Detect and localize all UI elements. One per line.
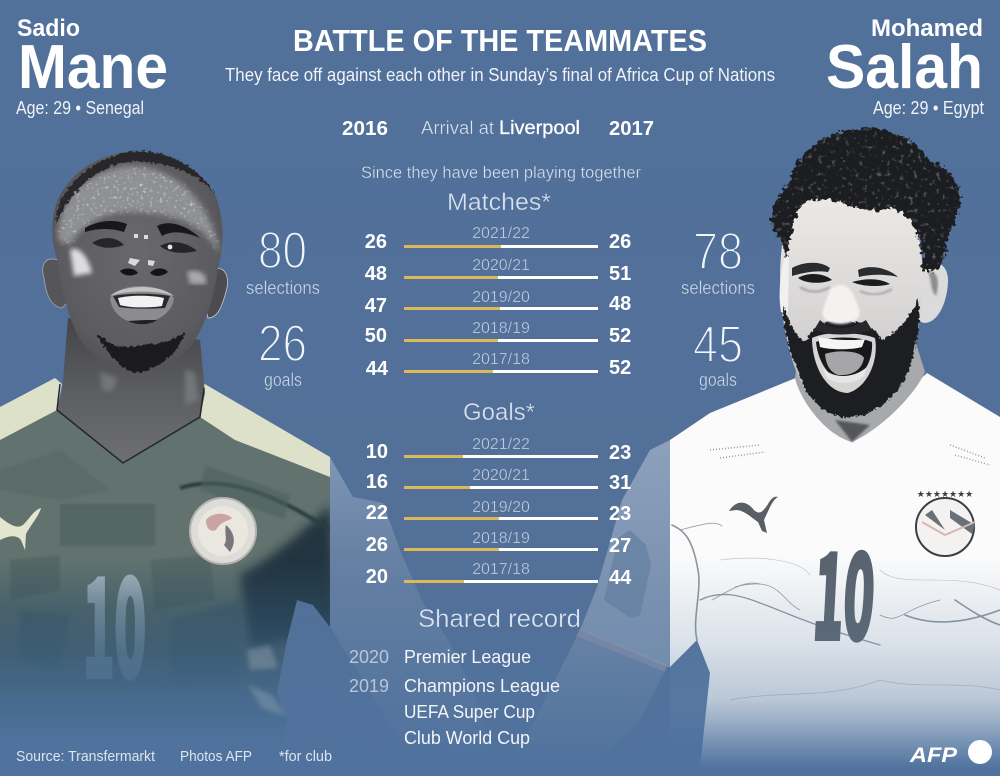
- egypt badge: [916, 489, 975, 556]
- lit arm highlight: [247, 645, 286, 716]
- row 2017/18: [366, 561, 632, 589]
- jersey of Mane: [0, 395, 330, 745]
- ear edge left: [780, 255, 789, 312]
- eyes: [798, 274, 832, 283]
- row 2018/19: 52: [609, 325, 631, 347]
- AFP logo: AFP: [909, 744, 958, 767]
- head: [52, 152, 223, 373]
- photo: Mohamed Salah: 10: [810, 504, 879, 672]
- source line: [16, 748, 332, 765]
- nose: [120, 268, 168, 276]
- right ear: [204, 269, 227, 318]
- yellow shoulder right: [200, 383, 330, 477]
- lower teeth: [823, 367, 867, 383]
- Club World Cup: Club World Cup: [404, 727, 530, 748]
- row 2017/18: 2017/18: [472, 351, 530, 368]
- stats: Salah: [681, 223, 755, 390]
- yellow shoulder left: [0, 378, 62, 440]
- row 2018/19: 2018/19: [472, 320, 530, 337]
- neck: [57, 318, 205, 463]
- nose: [823, 285, 860, 324]
- row 2020/21: [366, 467, 631, 494]
- surname: Mane: [18, 33, 168, 102]
- row 2017/18: 44: [609, 567, 632, 589]
- puma logo: [0, 508, 41, 550]
- goals label: goals: [264, 370, 302, 390]
- age and country: Age: 29 • Egypt: [873, 98, 984, 118]
- teeth: [818, 337, 865, 349]
- arrival label: Arrival at: [421, 118, 494, 138]
- Mane year: 2016: [342, 118, 388, 140]
- Liverpool label: Liverpool: [499, 118, 580, 139]
- goals label: goals: [699, 370, 737, 390]
- subtitle: They face off against each other in Sunday’s final of Africa Cup of Nations: [225, 65, 775, 85]
- Champions League: Champions League: [404, 675, 560, 696]
- neck: [795, 340, 925, 442]
- hair: [772, 128, 960, 272]
- patch on sleeve: [604, 530, 651, 618]
- heading: Shared record: [418, 605, 581, 633]
- name block: Mane: [16, 15, 168, 118]
- arm of Salah: [510, 630, 667, 760]
- row 2021/22: 26: [609, 231, 631, 253]
- federation badge: [190, 498, 256, 564]
- row 2021/22: 2021/22: [472, 436, 530, 453]
- mouth outer lips: [812, 333, 876, 393]
- row 2020/21: [365, 257, 631, 285]
- row 2019/20: 22: [366, 502, 388, 524]
- forehead light: [58, 166, 220, 255]
- stats: Mane: [246, 222, 320, 390]
- AFP logo: [909, 740, 992, 767]
- eyebrows: [85, 221, 127, 232]
- row 2018/19: 50: [365, 325, 387, 347]
- row 2021/22: 26: [365, 231, 387, 253]
- row 2020/21: 16: [366, 471, 388, 493]
- jersey of Salah: [670, 373, 1000, 768]
- footnote: *for club: [279, 748, 332, 765]
- collar: [57, 384, 204, 463]
- smile: [110, 286, 174, 323]
- tongue: [825, 351, 864, 375]
- row 2019/20: [365, 289, 631, 317]
- translucent sleeve of Salah: [580, 440, 670, 667]
- selections label: selections: [246, 278, 320, 298]
- heading: matches: Matches*: [447, 189, 551, 216]
- photo: Mohamed Salah: [510, 128, 1000, 768]
- row 2017/18: 20: [366, 566, 388, 588]
- year 2020: 2020: [349, 647, 389, 667]
- row 2018/19: [366, 530, 631, 557]
- row 2019/20: [366, 499, 631, 525]
- source: Source: Transfermarkt: [16, 748, 156, 765]
- selections value: 80: [258, 222, 307, 280]
- face: [780, 193, 923, 417]
- row 2019/20: 23: [609, 503, 631, 525]
- cuff: [576, 628, 667, 672]
- selections label: selections: [681, 278, 755, 298]
- row 2017/18: [366, 351, 631, 380]
- Salah year: 2017: [609, 118, 654, 140]
- chart: goals: [366, 436, 632, 589]
- egypt badge: ★★★★★★★: [917, 489, 973, 499]
- row 2018/19: 26: [366, 534, 388, 556]
- row 2019/20: 2019/20: [472, 499, 530, 516]
- lower fade: [0, 560, 332, 746]
- jersey wrinkles: [672, 523, 1000, 700]
- cheek highlights: [70, 249, 92, 276]
- eyebrows: [792, 263, 830, 276]
- jersey shading: [4, 452, 330, 646]
- intro line: Since they have been playing together: [361, 163, 641, 182]
- eyes: [92, 238, 124, 248]
- goals value: 26: [258, 315, 307, 373]
- row 2020/21: 2020/21: [472, 467, 530, 484]
- name block: Salah: [826, 15, 984, 118]
- photo: Sadio Mane: 10: [83, 521, 146, 715]
- arrival at Liverpool row: [342, 118, 654, 140]
- first name: Sadio: [17, 15, 80, 42]
- left ear: [43, 259, 70, 308]
- neck shadow: [835, 420, 870, 442]
- row 2017/18: 52: [609, 357, 631, 379]
- selections value: 78: [693, 223, 743, 281]
- puma logo: [729, 497, 778, 533]
- row 2020/21: 2020/21: [472, 257, 530, 274]
- row 2021/22: 23: [609, 442, 631, 464]
- row 2019/20: 2019/20: [472, 289, 530, 306]
- chart: matches: [365, 225, 631, 380]
- row 2018/19: 27: [609, 535, 631, 557]
- row 2017/18: 44: [366, 358, 389, 380]
- row 2019/20: 48: [609, 293, 631, 315]
- goatee: [97, 333, 184, 373]
- UEFA Super Cup: UEFA Super Cup: [404, 701, 535, 722]
- row 2017/18: 2017/18: [472, 561, 530, 578]
- surname: Salah: [826, 33, 983, 102]
- Premier League: Premier League: [404, 646, 531, 667]
- lip shadow: [128, 320, 157, 324]
- teeth: [118, 296, 164, 307]
- photo credit: Photos AFP: [180, 748, 252, 765]
- goals value: 45: [693, 316, 743, 374]
- row 2020/21: 48: [365, 263, 387, 285]
- row 2018/19: [365, 320, 631, 347]
- row 2020/21: 51: [609, 263, 631, 285]
- translucent sleeve of Mane: [330, 457, 492, 760]
- first name: Mohamed: [871, 15, 983, 42]
- row 2021/22: 2021/22: [472, 225, 530, 242]
- neck highlight: [100, 370, 198, 405]
- hair line: [56, 151, 216, 225]
- row 2021/22: [366, 436, 631, 464]
- dotted panels on chest: [710, 445, 990, 465]
- row 2021/22: 10: [366, 441, 388, 463]
- mouth inside: [816, 338, 872, 382]
- year 2019: 2019: [349, 676, 389, 696]
- lower fade: [670, 555, 1000, 768]
- row 2021/22: [365, 225, 631, 253]
- heading: goals: Goals*: [463, 399, 535, 426]
- title: BATTLE OF THE TEAMMATES: [293, 23, 707, 58]
- right ear: [914, 261, 948, 323]
- photo: Sadio Mane: [0, 151, 492, 760]
- age and country: Age: 29 • Senegal: [16, 98, 144, 118]
- beard: [783, 298, 919, 417]
- row 2020/21: 31: [609, 472, 631, 494]
- row 2018/19: 2018/19: [472, 530, 530, 547]
- eye bag shading: [800, 287, 892, 295]
- row 2019/20: 47: [365, 295, 387, 317]
- shared record: [349, 605, 581, 748]
